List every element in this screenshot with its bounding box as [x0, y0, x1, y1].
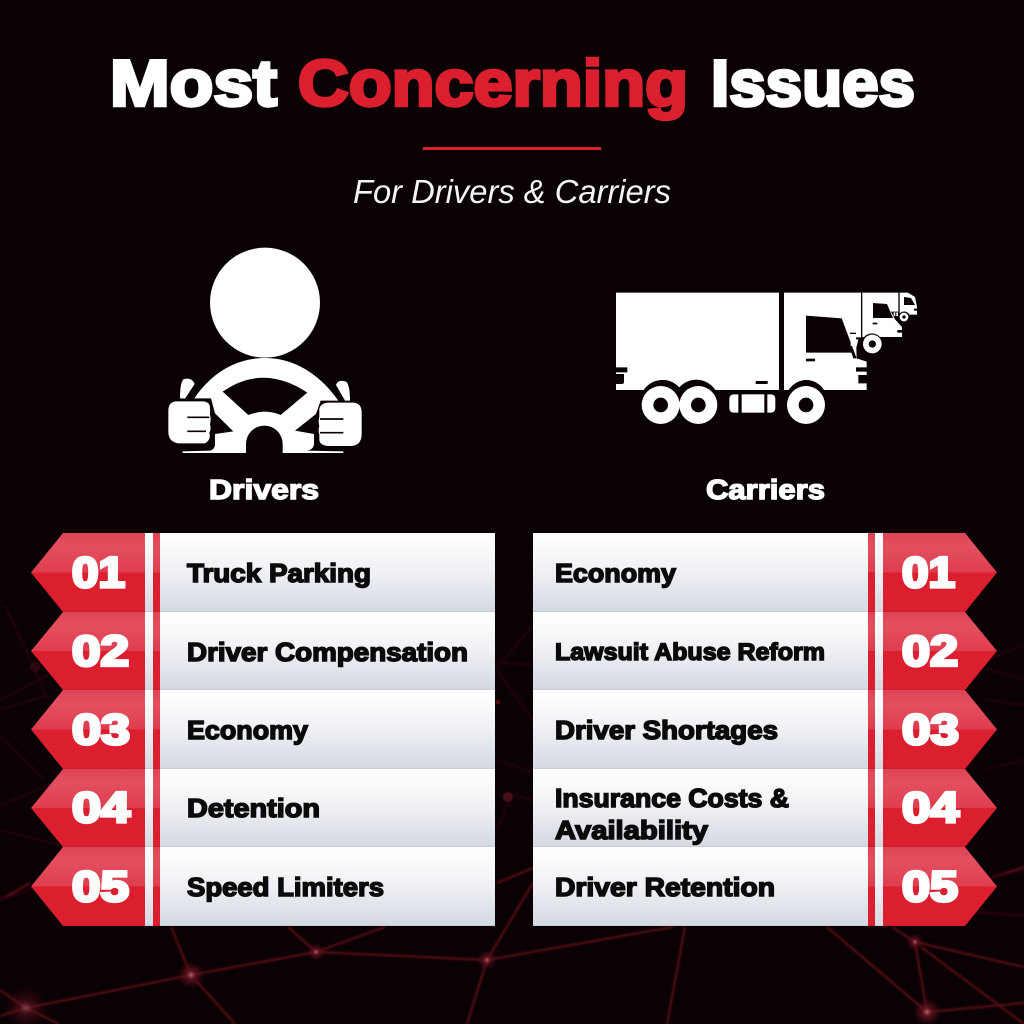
row: carrier issue 02 — [533, 612, 997, 690]
row: driver issue 05: 05 — [72, 863, 129, 911]
icon: driver at steering wheel — [168, 248, 362, 453]
title: Issues — [711, 46, 915, 120]
icon: trucks — [616, 293, 917, 424]
row: driver issue 03: 03 — [72, 706, 130, 754]
row: driver issue 03 — [31, 690, 495, 769]
row: driver issue 04: 04 — [72, 784, 130, 832]
row: driver issue 04: Detention — [187, 793, 320, 823]
network pattern — [0, 605, 1024, 1024]
panel: carriers list — [533, 533, 997, 926]
row: carrier issue 04: Insurance Costs & — [555, 783, 789, 813]
row: carrier issue 05 — [533, 847, 997, 926]
row: carrier issue 04: Availability — [555, 815, 709, 845]
title — [110, 46, 915, 120]
row: carrier issue 03: Driver Shortages — [555, 715, 778, 745]
row: driver issue 01: 01 — [72, 549, 125, 597]
wheels — [642, 386, 680, 424]
row: driver issue 02 — [31, 612, 495, 690]
main cab — [784, 293, 867, 390]
row: carrier issue 02: 02 — [902, 628, 958, 676]
row: carrier issue 01: Economy — [555, 558, 677, 588]
heading: Drivers: Drivers — [209, 474, 319, 505]
row: driver issue 05 — [31, 847, 495, 926]
row: carrier issue 01: 01 — [902, 549, 955, 597]
row: driver issue 04 — [31, 769, 495, 847]
title: Most — [110, 46, 277, 120]
row: driver issue 01: Truck Parking — [187, 558, 371, 588]
row: carrier issue 05: Driver Retention — [555, 872, 775, 902]
row: carrier issue 05: 05 — [902, 863, 958, 911]
panel: drivers list — [31, 533, 495, 926]
title rule — [423, 147, 601, 150]
row: carrier issue 01 — [533, 533, 997, 612]
row: carrier issue 04: 04 — [902, 784, 959, 832]
row: driver issue 02: 02 — [72, 628, 129, 676]
row: carrier issue 04 — [533, 769, 997, 847]
title: Concerning — [298, 46, 688, 120]
row: carrier issue 02: Lawsuit Abuse Reform — [555, 639, 825, 666]
heading: Carriers: Carriers — [706, 474, 825, 505]
fuel tank — [729, 394, 738, 413]
row: carrier issue 03: 03 — [902, 706, 959, 754]
trailer — [616, 293, 779, 390]
network nodes — [4, 662, 941, 1024]
third truck — [900, 293, 917, 315]
row: carrier issue 03 — [533, 690, 997, 769]
row: driver issue 05: Speed Limiters — [187, 872, 384, 902]
row: driver issue 01 — [31, 533, 495, 612]
row: driver issue 02: Driver Compensation — [187, 637, 468, 667]
subtitle: For Drivers & Carriers — [353, 173, 671, 210]
row: driver issue 03: Economy — [187, 715, 309, 745]
second truck — [862, 293, 902, 337]
